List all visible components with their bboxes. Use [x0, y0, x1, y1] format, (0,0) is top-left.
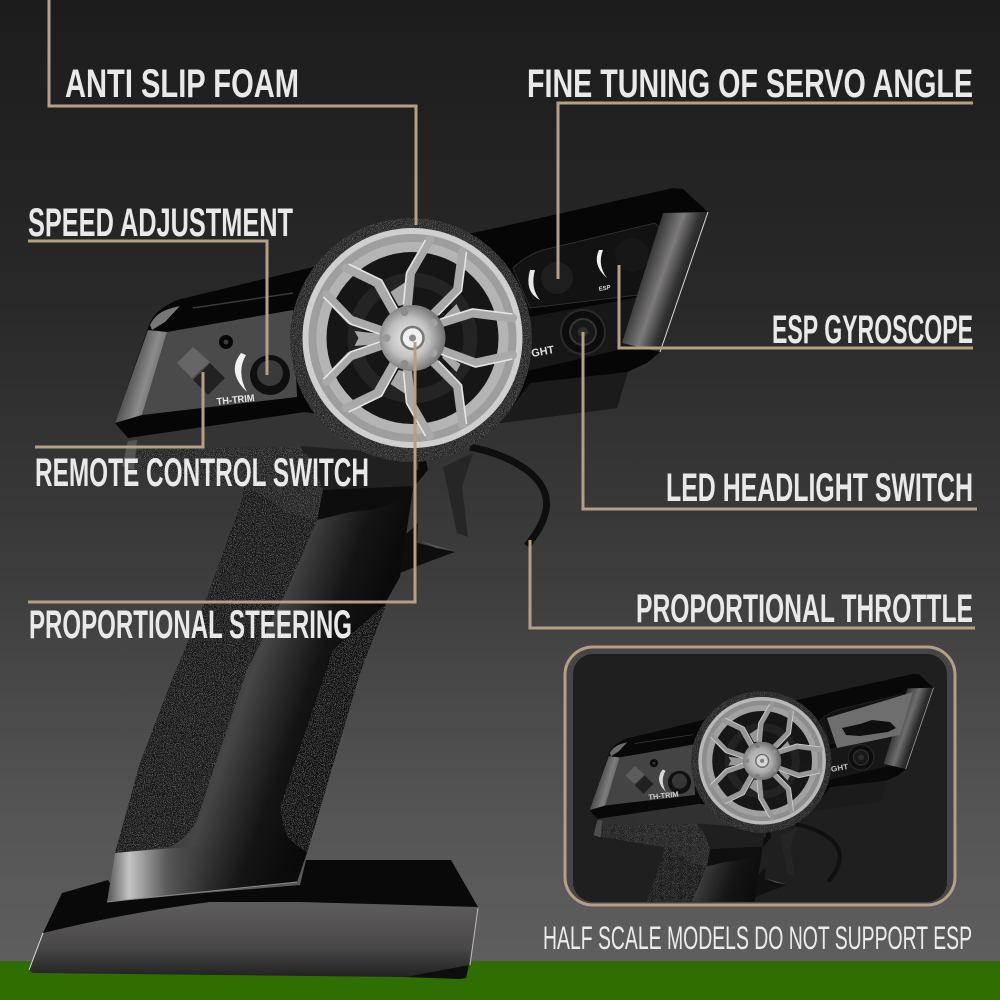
label: remote control switch: REMOTE CONTROL SWITCH	[35, 451, 369, 495]
wheel	[290, 218, 532, 462]
left textured strip	[115, 487, 317, 853]
inset car silhouette	[842, 720, 896, 736]
ESP knob	[615, 238, 649, 272]
inset logo plate	[827, 692, 913, 748]
label: anti slip foam: ANTI SLIP FOAM	[65, 62, 299, 106]
base	[29, 860, 478, 979]
control head	[115, 188, 708, 438]
right textured pocket	[280, 603, 387, 853]
leader lines	[28, 0, 977, 628]
label: proportional steering: PROPORTIONAL STEERING	[29, 603, 352, 647]
silver collar	[107, 846, 215, 902]
label: ESP: ESP	[598, 285, 611, 293]
grip	[107, 412, 428, 902]
inset controller: GHT	[830, 762, 849, 774]
trigger	[400, 447, 547, 573]
trim marks	[528, 270, 540, 300]
label: TH-TRIM: TH-TRIM	[216, 393, 255, 408]
inset controller	[590, 674, 934, 902]
inset controller: TH-TRIM	[648, 790, 679, 802]
fine tuning knob	[541, 262, 573, 294]
label: light: GHT	[530, 344, 555, 360]
green ground strip	[0, 961, 1000, 1000]
panel: half scale model inset	[565, 647, 955, 905]
controller illustration	[29, 188, 708, 979]
label: speed adjustment: SPEED ADJUSTMENT	[28, 201, 293, 245]
